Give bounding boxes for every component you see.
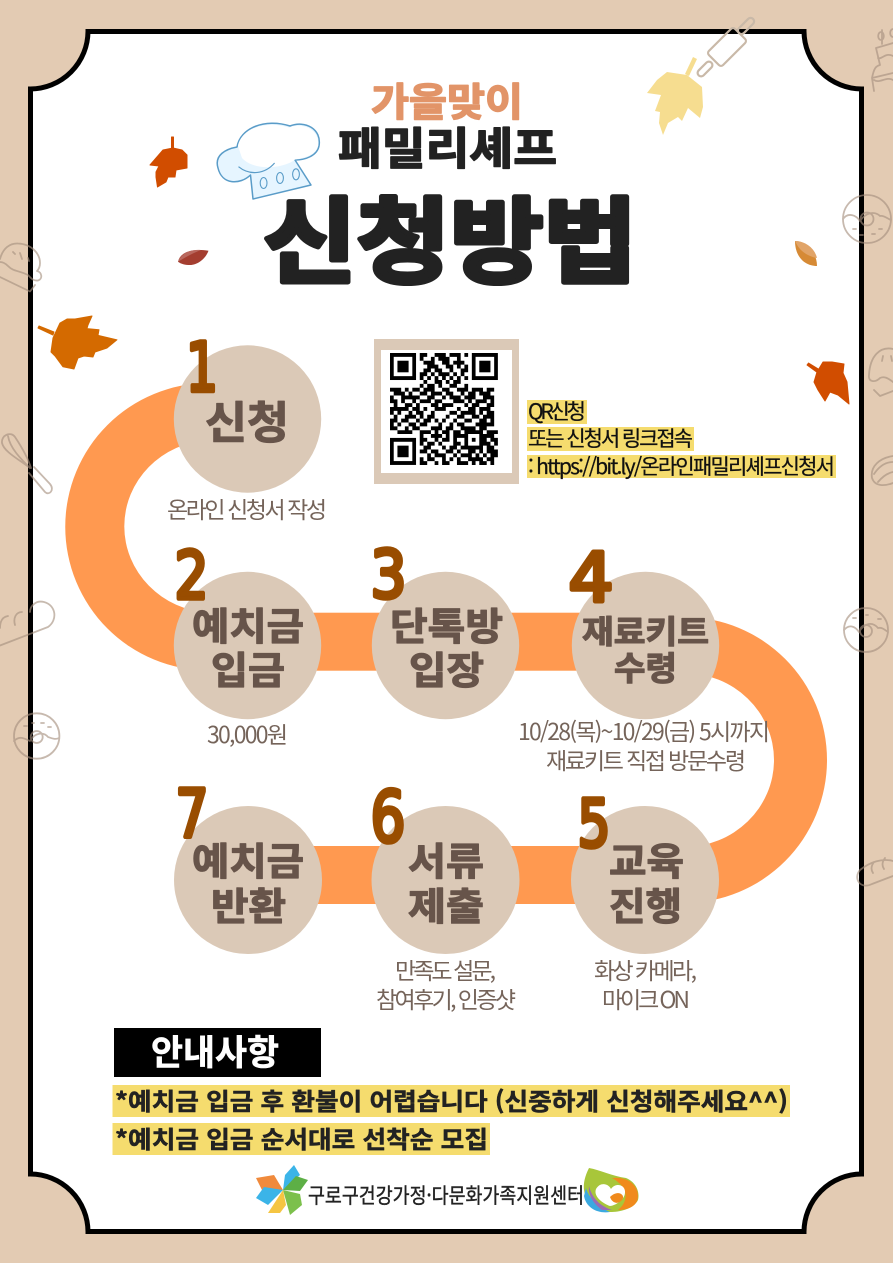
- title: 가을맞이: [371, 72, 523, 128]
- step 2: 입금: [211, 640, 285, 695]
- step 5: [571, 786, 719, 1015]
- decoration: pie right: [869, 348, 893, 396]
- step 3: 3: [370, 536, 406, 614]
- step 7: 예치금: [192, 831, 304, 886]
- step 2: 예치금: [192, 596, 304, 651]
- step 5: 화상 카메라,: [594, 952, 697, 986]
- title: 신청방법: [263, 167, 637, 302]
- step 6: 제출: [408, 876, 484, 931]
- decoration: donut left: [14, 713, 59, 759]
- step 5: 교육: [609, 831, 684, 886]
- QR application note: QR신청: [528, 396, 586, 426]
- decoration: donut top right: [843, 195, 891, 243]
- QR application note: [527, 396, 836, 481]
- step 3: 입장: [409, 640, 484, 695]
- center logo: heart mark: [584, 1168, 638, 1212]
- step 6: 참여후기, 인증샷: [376, 981, 516, 1015]
- step 7: [174, 776, 322, 954]
- step 4: 재료키트 직접 방문수령: [546, 742, 746, 776]
- icon: yellow leaf: [647, 57, 703, 135]
- step 2: 2: [174, 538, 208, 614]
- step 6: [370, 776, 520, 1015]
- step 4: [518, 539, 770, 776]
- icon: small red leaf: [178, 250, 208, 265]
- title: 패밀리셰프: [338, 113, 557, 177]
- step 2: 30,000원: [207, 716, 288, 750]
- step 4: 4: [568, 539, 614, 618]
- icon: chef hat: [217, 123, 319, 199]
- decoration: donut middle right: [844, 608, 888, 652]
- notice heading: 안내사항: [151, 1025, 279, 1076]
- step 3: 단톡방: [390, 596, 503, 651]
- decoration: whisk: [2, 434, 52, 493]
- notice heading: [114, 1025, 321, 1077]
- center logo: pinwheel: [256, 1165, 308, 1215]
- QR application note: : https://bit.ly/온라인패밀리셰프신청서: [528, 451, 835, 481]
- QR application note: 또는 신청서 링크접속: [528, 423, 693, 453]
- step 6: 6: [370, 776, 406, 858]
- icon: orange seed leaf: [795, 241, 817, 266]
- decoration: rolling pin: [696, 16, 756, 78]
- QR code: [374, 339, 519, 484]
- step 1: 온라인 신청서 작성: [167, 491, 327, 525]
- step 4: 재료키트: [582, 607, 709, 653]
- icon: big orange leaf: [38, 316, 117, 369]
- step 5: 진행: [609, 876, 682, 931]
- step 1: [167, 329, 327, 525]
- title: [263, 72, 637, 302]
- icon: right red leaf: [807, 362, 849, 404]
- step 5: 5: [578, 786, 610, 862]
- step 1: 1: [186, 329, 218, 408]
- center name: 구로구건강가정·다문화가족지원센터: [308, 1180, 584, 1210]
- step 7: 7: [176, 776, 208, 852]
- decoration: cake: [872, 29, 893, 91]
- step 2: [174, 538, 321, 750]
- step 4: 10/28(목)~10/29(금) 5시까지: [518, 713, 770, 747]
- flow path: [65, 383, 827, 904]
- decoration: nut right: [872, 456, 893, 485]
- icon: red maple leaf: [150, 137, 187, 187]
- decoration: pie left: [0, 243, 41, 292]
- notice line 1: *예치금 입금 후 환불이 어렵습니다 (신중하게 신청해주세요^^): [115, 1082, 788, 1117]
- step 5: 마이크 ON: [602, 981, 690, 1015]
- step 6: 서류: [408, 831, 484, 886]
- decoration: baguette: [0, 602, 54, 646]
- step 4: 수령: [614, 642, 677, 690]
- decoration: bread right: [857, 858, 893, 886]
- step 1: 신청: [205, 387, 289, 451]
- notice line 2: *예치금 입금 순서대로 선착순 모집: [115, 1120, 488, 1155]
- step 6: 만족도 설문,: [395, 952, 496, 986]
- step 7: 반환: [211, 876, 286, 931]
- step 3: [370, 536, 519, 719]
